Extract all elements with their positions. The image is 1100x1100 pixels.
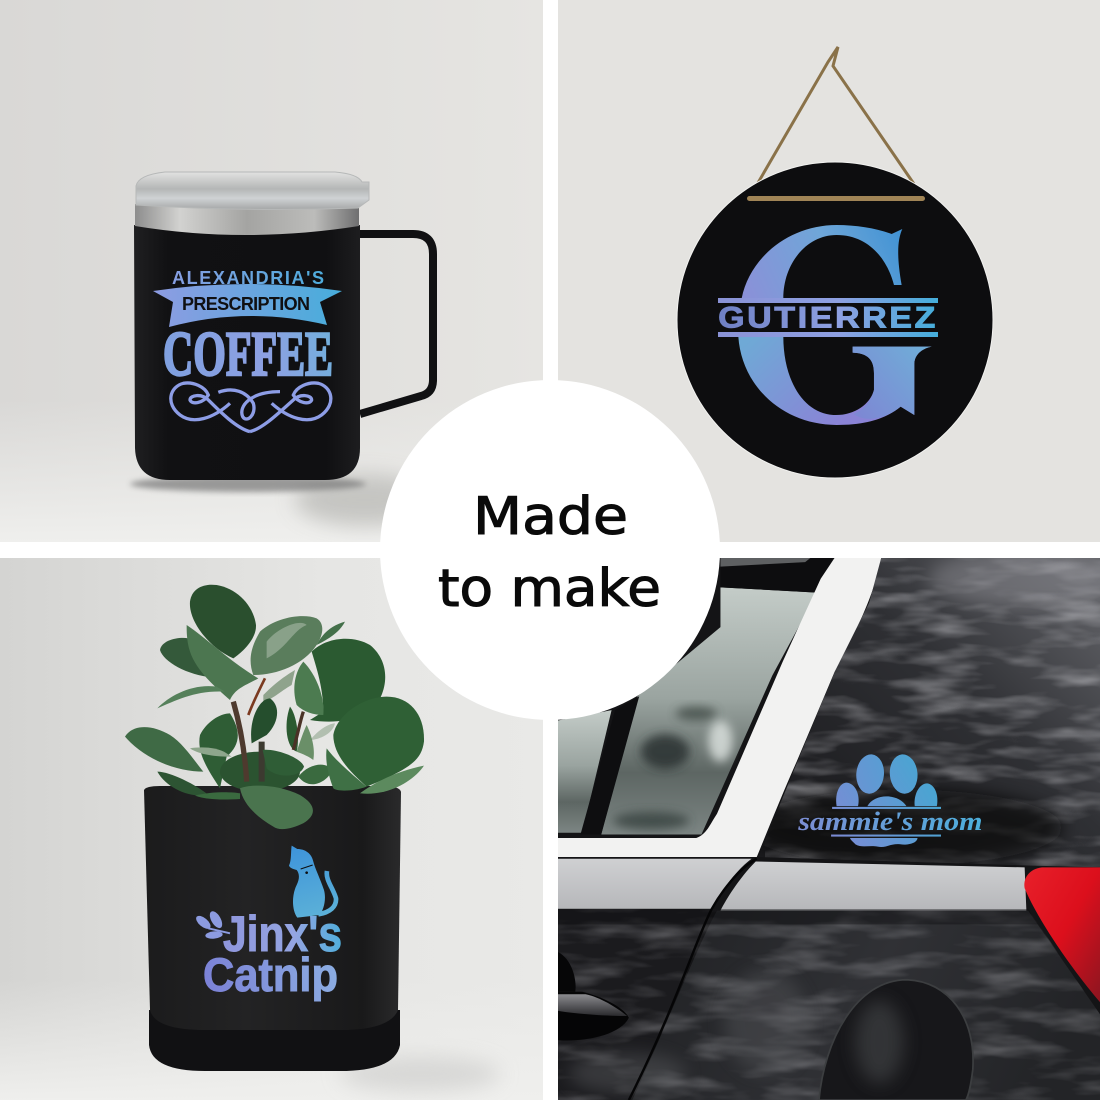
icon: sprig bbox=[196, 911, 230, 939]
mug design: Alexandria's: ALEXANDRIA'S bbox=[172, 268, 324, 288]
round sign bbox=[677, 162, 993, 478]
pot text: Jinx's: Jinx's bbox=[223, 906, 342, 962]
pot body bbox=[144, 786, 401, 1030]
pot text: Catnip: Catnip bbox=[203, 948, 338, 1001]
steel rim bbox=[135, 204, 359, 235]
name band bbox=[718, 298, 938, 337]
twine hanger bbox=[755, 47, 914, 188]
panel: plant pot photo bbox=[0, 558, 543, 1100]
mug body bbox=[134, 225, 360, 480]
panel: car decal photo bbox=[558, 551, 1100, 1100]
name: Gutierrez: GUTIERREZ bbox=[718, 301, 935, 334]
headline line 2: to make bbox=[438, 559, 661, 619]
pot saucer bbox=[149, 1010, 400, 1071]
icon: paw decal bbox=[831, 753, 941, 847]
center circle with headline bbox=[380, 380, 720, 720]
mug design: Coffee: COFFEE bbox=[163, 319, 333, 389]
mug design: banner bbox=[153, 284, 342, 327]
mug design: Prescription: PRESCRIPTION bbox=[182, 294, 310, 314]
decal text: sammie's mom: sammie's mom bbox=[797, 807, 982, 836]
car body traced bbox=[558, 551, 1100, 1100]
icon: mug handle bbox=[358, 234, 433, 414]
headline line 1: Made bbox=[473, 487, 628, 547]
monogram letter G bbox=[738, 225, 932, 425]
twine bar bbox=[747, 196, 925, 201]
clear lid bbox=[136, 172, 369, 209]
panel: wall sign photo bbox=[558, 0, 1100, 542]
panel: insulated mug photo bbox=[0, 0, 543, 542]
mug design: flourish bbox=[171, 383, 331, 432]
icon: cat silhouette bbox=[289, 846, 336, 918]
plant: stems and leaves bbox=[125, 585, 424, 829]
